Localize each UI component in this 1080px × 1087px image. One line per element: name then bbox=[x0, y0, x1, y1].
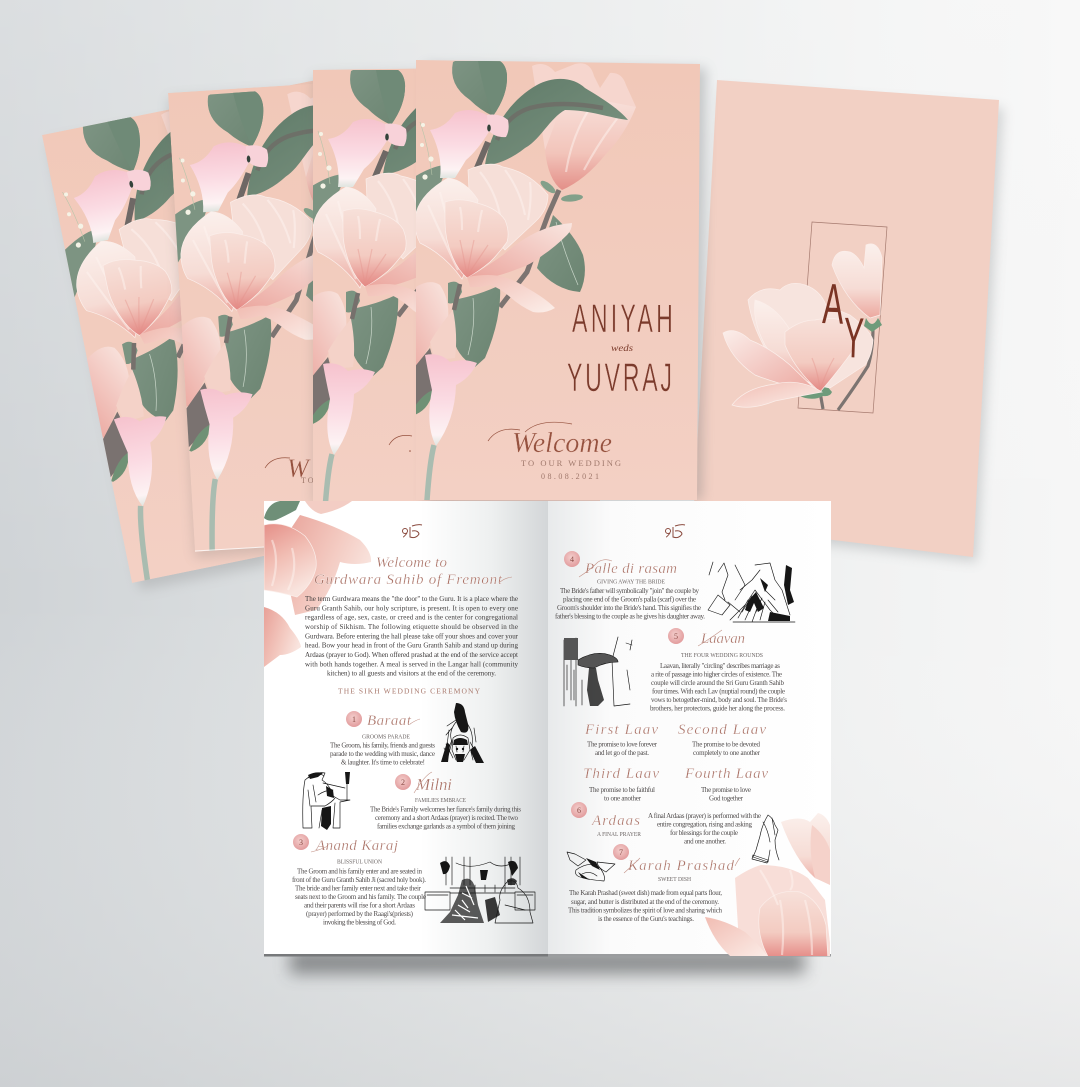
fourth laav: Fourth Laav bbox=[684, 766, 768, 782]
step 1: baraat: GROOMS PARADE bbox=[362, 734, 410, 740]
monogram frame bbox=[798, 222, 887, 413]
step 4: palle di rasam: placing one end of the Groom's palla (scarf) over the bbox=[563, 596, 696, 604]
step 2: milni: The Bride's Family welcomes her fiance's family during this bbox=[370, 806, 521, 814]
icon: ik onkar bbox=[402, 525, 422, 538]
heading: welcome: Gurdwara Sahib of Fremont bbox=[314, 572, 503, 588]
monogram letters: Y bbox=[843, 306, 865, 371]
first laav: First Laav bbox=[584, 722, 658, 738]
icon: palla sketch bbox=[708, 562, 795, 622]
step 3: anand karaj: 3 bbox=[299, 838, 303, 847]
step 4: palle di rasam: 4 bbox=[570, 555, 574, 564]
step 3: anand karaj: BLISSFUL UNION bbox=[337, 860, 383, 866]
step 7: karah prashad: This tradition symbolizes the spirit of love and sharing which bbox=[568, 906, 722, 914]
couple names: YUVRAJ bbox=[567, 354, 672, 400]
illustration: magnolia and calla bouquet bbox=[416, 61, 636, 500]
step 2: milni: 2 bbox=[401, 778, 405, 787]
step 3: anand karaj bbox=[292, 834, 426, 926]
step 1: baraat: Baraat bbox=[367, 713, 412, 729]
step 6: ardaas: A FINAL PRAYER bbox=[597, 832, 641, 838]
step 3: anand karaj: invoking the blessing of God. bbox=[323, 918, 396, 926]
text block: introduction: regardless of age, sex, caste, or creed and is the center for congregational bbox=[305, 614, 518, 622]
step 3: anand karaj: The Groom and his family enter and are seated in bbox=[297, 868, 422, 876]
panel: left booklet page bbox=[264, 501, 548, 956]
step 6: ardaas bbox=[571, 802, 761, 846]
step 5: laavan: couple will circle around the Sri Guru Granth Sahib bbox=[651, 679, 784, 687]
welcome text bbox=[488, 422, 621, 481]
step 7: karah prashad: SWEET DISH bbox=[658, 877, 692, 883]
step 5: laavan: a rite of passage into higher circles of existence. The bbox=[651, 670, 782, 678]
welcome text: TO OUR WEDDING bbox=[521, 458, 621, 468]
step 1: baraat: 1 bbox=[352, 715, 356, 724]
icon: bride and groom on horse sketch bbox=[441, 703, 484, 763]
step 5: laavan: THE FOUR WEDDING ROUNDS bbox=[681, 653, 763, 659]
first laav: The promise to love forever bbox=[587, 740, 658, 748]
text block: introduction: The term Gurdwara means the "the door" to the Guru. It is a place where the bbox=[305, 595, 518, 603]
step 2: milni: ceremony and a short Ardaas (prayer) is recited. The two bbox=[375, 814, 518, 822]
monogram letters bbox=[822, 272, 865, 371]
step 6: ardaas: A final Ardaas (prayer) is performed with the bbox=[648, 812, 761, 820]
step 2: milni: FAMILIES EMBRACE bbox=[415, 798, 466, 804]
step 5: laavan: 5 bbox=[674, 632, 678, 641]
text block: introduction: Guru Granth Sahib, our holy scripture, is present. It is open to every one bbox=[305, 604, 518, 612]
illustration: corner magnolias bbox=[705, 813, 832, 960]
icon: sweet dish sketch bbox=[567, 852, 615, 881]
step 7: karah prashad: 7 bbox=[619, 848, 623, 857]
step 2: milni: Milni bbox=[415, 775, 452, 794]
couple names: weds bbox=[611, 343, 634, 353]
step 4: palle di rasam: GIVING AWAY THE BRIDE bbox=[597, 580, 665, 586]
step 7: karah prashad: is the essence of the Guru's teachings. bbox=[598, 915, 694, 923]
step 3: anand karaj: and their parents will rise for a short Ardaas bbox=[304, 902, 415, 910]
icon: palla and tassel sketch bbox=[564, 637, 632, 706]
couple names: ANIYAH bbox=[572, 295, 673, 341]
step 5: laavan: four times. With each Lav (nuptial round) the couple bbox=[652, 688, 785, 696]
step 7: karah prashad: sugar, and butter is distributed at the end of the ceremony. bbox=[571, 898, 719, 906]
couple names bbox=[567, 295, 673, 400]
step 3: anand karaj: The bride and her family enter next and take their bbox=[295, 884, 422, 892]
step 7: karah prashad bbox=[568, 844, 740, 923]
icon: garland exchange sketch bbox=[303, 772, 350, 830]
welcome text: Welcome bbox=[512, 428, 612, 459]
step 6: ardaas: for blessings for the couple bbox=[670, 829, 738, 837]
heading: the sikh wedding ceremony: THE SIKH WEDDING CEREMONY bbox=[338, 686, 481, 696]
second laav: Second Laav bbox=[678, 722, 766, 738]
step 4: palle di rasam: Palle di rasam bbox=[584, 561, 677, 577]
heading: welcome: Welcome to bbox=[376, 555, 448, 571]
text block: introduction: head. Bow your head in front of the Guru Granth Sahib and stand up during bbox=[305, 642, 518, 650]
second laav: The promise to be devoted bbox=[692, 740, 760, 748]
step 6: ardaas: 6 bbox=[577, 806, 581, 815]
text block: introduction: with both hands together. A meal is served in the Langar hall (community bbox=[305, 660, 518, 668]
text block: introduction: Ardaas (prayer to God). When offered prashad at the end of the service accept bbox=[305, 651, 518, 659]
step 4: palle di rasam: The Bride's father will symbolically "join" the couple by bbox=[560, 587, 700, 595]
step 1: baraat: The Groom, his family, friends and guests bbox=[330, 742, 435, 750]
step 3: anand karaj: Anand Karaj bbox=[315, 838, 398, 854]
monogram letters: A bbox=[822, 272, 845, 337]
text block: introduction bbox=[305, 595, 519, 678]
panel: card 2 bbox=[165, 85, 313, 561]
step 5: laavan: brothers, her protectors, guide her along the process. bbox=[650, 704, 785, 712]
step 2: milni bbox=[370, 772, 521, 830]
fourth laav: The promise to love bbox=[701, 786, 751, 794]
icon: wedding ceremony sketch bbox=[425, 857, 535, 923]
icon: ik onkar bbox=[666, 525, 685, 538]
welcome text: 08.08.2021 bbox=[541, 472, 599, 481]
step 1: baraat: & laughter. It's time to celebrate! bbox=[341, 758, 425, 766]
second laav bbox=[678, 722, 766, 757]
step 7: karah prashad: Karah Prashad bbox=[627, 858, 734, 874]
panel: card 2: W bbox=[287, 454, 311, 483]
step 6: ardaas: and one another. bbox=[684, 838, 726, 846]
third laav: to one another bbox=[604, 794, 642, 802]
third laav bbox=[583, 766, 659, 802]
step 3: anand karaj: seats next to the Groom and his family. The couple bbox=[295, 893, 426, 901]
fourth laav bbox=[684, 766, 768, 802]
panel: back cover card with monogram bbox=[693, 80, 1003, 562]
step 4: palle di rasam: Groom's shoulder into the Bride's hand. This signifies the bbox=[557, 604, 701, 612]
step 5: laavan: Laavan bbox=[700, 631, 745, 647]
panel: card 2: TO bbox=[301, 476, 316, 485]
step 2: milni: families exchange garlands as a symbol of them joining bbox=[377, 822, 516, 830]
text block: introduction: kitchen) to all guests and visitors at the end of the ceremony. bbox=[327, 670, 496, 678]
third laav: The promise to be faithful bbox=[589, 786, 655, 794]
step 1: baraat: parade to the wedding with music, dance bbox=[330, 750, 435, 758]
first laav bbox=[584, 722, 658, 757]
step 3: anand karaj: front of the Guru Granth Sahib Ji (sacred holy book). bbox=[292, 876, 426, 884]
step 3: anand karaj: (prayer) performed by the Raagi's(priests) bbox=[306, 910, 414, 918]
heading: welcome bbox=[314, 555, 512, 588]
text block: introduction: Gurdwara. Before entering the hall please take off your shoes and cover your bbox=[305, 632, 519, 640]
illustration: monogram magnolia bbox=[723, 244, 882, 410]
step 5: laavan: Laavan, literally "circling" describes marriage as bbox=[660, 662, 780, 670]
first laav: and let go of the past. bbox=[595, 749, 649, 757]
step 6: ardaas: Ardaas bbox=[591, 813, 640, 829]
step 1: baraat bbox=[330, 711, 435, 766]
step 5: laavan: vows to betogether-mind, body and soul. The Bride's bbox=[651, 696, 787, 704]
step 5: laavan bbox=[650, 628, 787, 712]
booklet shadow bbox=[290, 950, 805, 974]
icon: praying hands sketch bbox=[752, 815, 779, 863]
panel: front cover card bbox=[416, 60, 711, 501]
panel: card 1 bbox=[42, 80, 313, 590]
step 6: ardaas: entire congregation, rising and asking bbox=[657, 820, 752, 828]
step 4: palle di rasam bbox=[555, 551, 705, 620]
third laav: Third Laav bbox=[583, 766, 659, 782]
panel: card 3 bbox=[309, 68, 600, 501]
panel: right booklet page bbox=[548, 501, 832, 960]
second laav: completely to one another bbox=[693, 749, 761, 757]
illustration: corner magnolia bbox=[264, 501, 371, 667]
step 4: palle di rasam: father's blessing to the couple as he gives his daughter away. bbox=[555, 612, 705, 620]
step 7: karah prashad: The Karah Prashad (sweet dish) made from equal parts flour, bbox=[569, 889, 722, 897]
text block: introduction: worship of Sikhism. The following etiquette should be observed in the bbox=[305, 623, 518, 631]
fourth laav: God together bbox=[709, 794, 744, 802]
